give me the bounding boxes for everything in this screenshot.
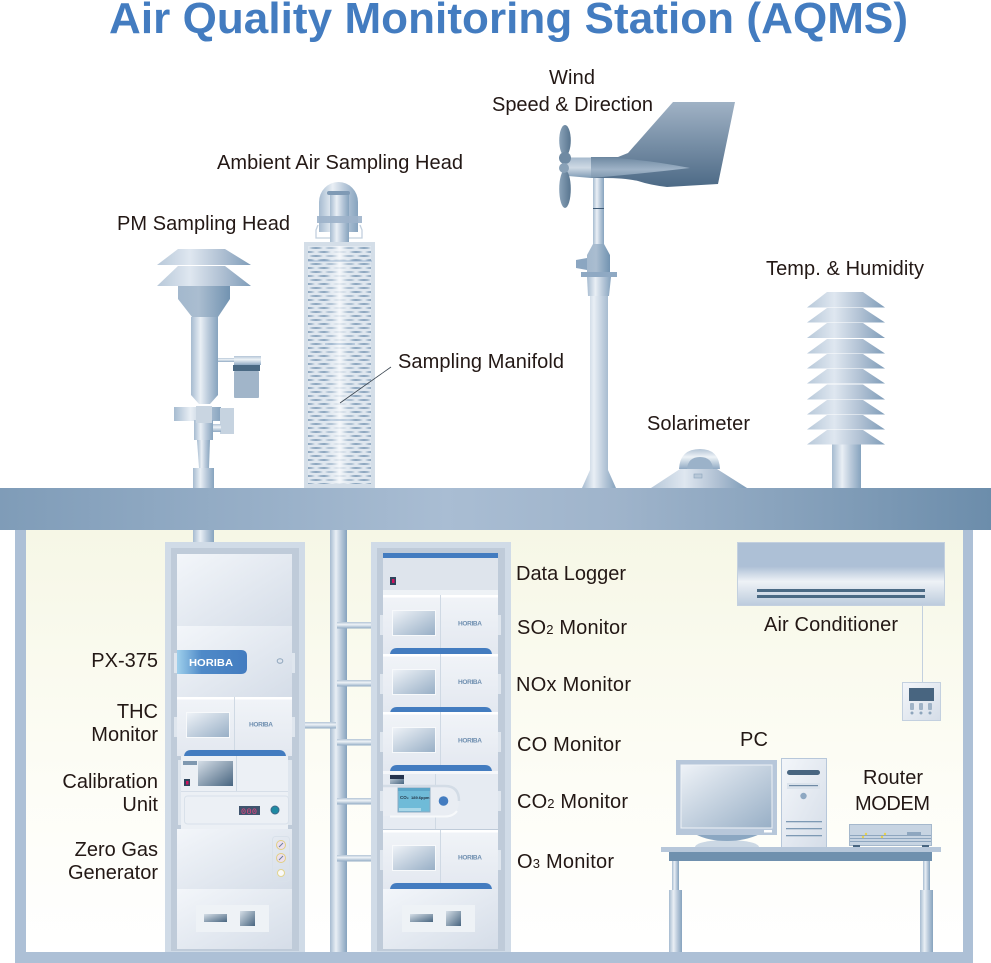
- label: Sampling Manifold: Sampling Manifold: [398, 351, 564, 373]
- label: Calibration Unit: Calibration: [62, 771, 158, 793]
- label: Solarimeter: Solarimeter: [647, 413, 750, 435]
- rack top panel: [177, 554, 292, 626]
- left rack: [165, 542, 305, 952]
- PM sampling head: [157, 249, 261, 488]
- router modem: [850, 824, 932, 847]
- computer monitor: [676, 760, 777, 854]
- label: NOx Monitor: NOx Monitor: [516, 674, 631, 696]
- rack labels: right side: [516, 563, 631, 873]
- label: Router MODEM: MODEM: [855, 793, 930, 815]
- desk: [661, 847, 941, 952]
- SO2 monitor unit: HORIBA: [458, 620, 482, 628]
- ambient air sampling head and manifold: [304, 182, 375, 488]
- label: Router MODEM: [855, 767, 930, 815]
- label: O3 Monitor: O3 Monitor: [517, 851, 614, 873]
- label: THC Monitor: [91, 701, 158, 746]
- calibration unit: [178, 756, 292, 829]
- left rack base unit: [177, 889, 292, 949]
- label: CO Monitor: CO Monitor: [517, 734, 621, 756]
- room interior and walls: [15, 528, 973, 963]
- CO2 monitor unit: CO₂: [400, 795, 409, 800]
- zero gas generator: [177, 829, 292, 889]
- NOx monitor unit: [380, 654, 501, 713]
- THC monitor unit: HORIBA: [249, 722, 273, 728]
- PX-375 unit: HORIBA: [189, 657, 233, 669]
- label: Ambient Air Sampling Head: Ambient Air Sampling Head: [217, 152, 463, 174]
- label: Zero Gas Generator: Zero Gas: [75, 839, 158, 861]
- label: THC Monitor: THC: [117, 701, 158, 723]
- label: SO2 Monitor: SO2 Monitor: [517, 617, 627, 639]
- CO monitor unit: HORIBA: [458, 738, 482, 744]
- solarimeter: [651, 449, 747, 488]
- calibration unit: 000: [241, 807, 257, 817]
- label: Air Conditioner: Air Conditioner: [764, 614, 898, 636]
- label: CO2 Monitor: CO2 Monitor: [517, 791, 628, 813]
- manifold pipe and branches: [305, 530, 371, 952]
- data logger: [383, 553, 498, 596]
- air conditioner: [738, 542, 944, 606]
- duct from PM head to rack: [193, 530, 214, 542]
- label: Wind Speed & Direction: [492, 67, 653, 116]
- label: Calibration Unit: Unit: [122, 794, 158, 816]
- label: Calibration Unit: [62, 771, 158, 816]
- air conditioner remote and wire: [902, 606, 940, 720]
- right rack: [371, 542, 511, 952]
- leader line: sampling manifold: [340, 367, 391, 403]
- CO2 monitor unit: 189.6ppm: [411, 795, 430, 800]
- rack labels: left side: [62, 650, 158, 884]
- SO2 monitor unit: [380, 595, 501, 654]
- temperature and humidity sensor: [807, 292, 885, 488]
- O3 monitor unit: [380, 830, 501, 889]
- NOx monitor unit: HORIBA: [458, 679, 482, 686]
- label: Wind Speed & Direction: Speed & Direction: [492, 94, 653, 116]
- label: Wind Speed & Direction: Wind: [549, 67, 595, 89]
- label: Zero Gas Generator: Generator: [68, 862, 158, 884]
- O3 monitor unit: HORIBA: [458, 854, 482, 862]
- label: PC: PC: [740, 729, 768, 751]
- right rack base unit: [383, 889, 498, 949]
- PX-375 unit: [174, 626, 295, 697]
- label: Zero Gas Generator: [68, 839, 158, 884]
- label: PM Sampling Head: PM Sampling Head: [117, 213, 290, 235]
- computer tower: [782, 758, 826, 848]
- label: Temp. & Humidity: Temp. & Humidity: [766, 258, 924, 280]
- THC monitor unit: [174, 697, 295, 756]
- CO monitor unit: [380, 712, 501, 771]
- label: PX-375: PX-375: [91, 650, 158, 672]
- label: Data Logger: Data Logger: [516, 563, 626, 585]
- label: THC Monitor: Monitor: [91, 724, 158, 746]
- CO2 monitor unit: [380, 771, 501, 829]
- label: Router MODEM: Router: [863, 767, 923, 789]
- wind speed and direction sensor: [559, 102, 735, 488]
- roof slab: [0, 488, 991, 530]
